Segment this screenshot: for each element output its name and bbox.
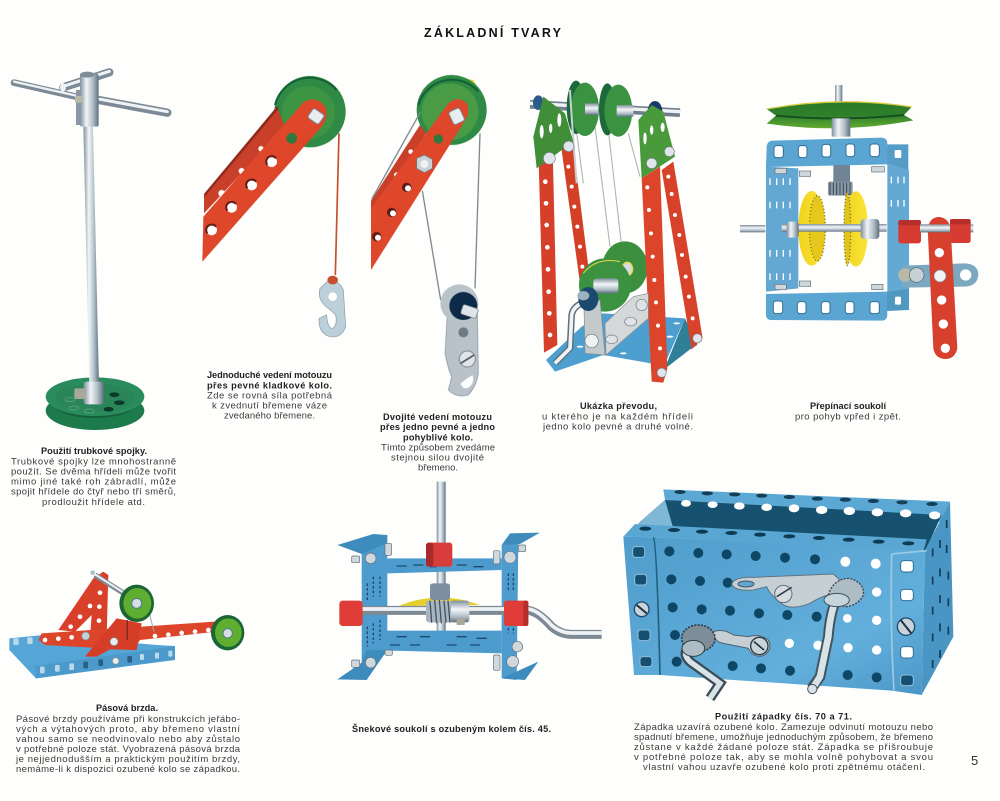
bolts bbox=[543, 141, 702, 377]
caption: tube coupling: mimo jiné také roh zábradlí, může bbox=[11, 476, 176, 488]
caption: band brake: je nejjednodušším a praktickým použitím brzdy, bbox=[15, 754, 240, 765]
caption: double rope guide: Tímto způsobem zvedáme bbox=[381, 442, 495, 454]
page number: 5 bbox=[971, 753, 978, 768]
blue base plate bbox=[9, 635, 175, 678]
lower ratchet wheel and crank bbox=[682, 625, 720, 698]
illustration: gear transmission demo bbox=[530, 81, 703, 383]
caption: transmission demo: u kterého je na každém hřídeli bbox=[542, 412, 693, 422]
caption: band brake: vých a výtahových proto, aby břemeno vlastní bbox=[16, 724, 240, 735]
simple pulley: rear strip bbox=[204, 106, 285, 213]
caption: simple rope guide: zvedaného břemene. bbox=[224, 410, 315, 422]
illustration: band brake bbox=[9, 570, 244, 678]
upper pawl bbox=[732, 574, 840, 607]
caption: tube coupling: Trubkové spojky lze mnohostranně bbox=[11, 456, 176, 468]
simple pulley: hook bbox=[319, 276, 346, 337]
caption: ratchet: vlastní vahou uzavře ozubené kolo proti zpětnému otáčení. bbox=[643, 762, 925, 773]
caption: simple rope guide: Zde se rovná síla potřebná bbox=[207, 390, 333, 402]
left front strip bbox=[538, 149, 557, 353]
side plates of frame bbox=[766, 144, 909, 311]
caption: ratchet: spadnutí břemene, umožňuje jednoduchým způsobem, že břemeno bbox=[634, 732, 933, 743]
corner slots and screws bbox=[633, 547, 915, 686]
caption: band brake bbox=[15, 703, 241, 775]
caption: reversing gear bbox=[795, 401, 901, 422]
lower collar bbox=[74, 382, 104, 404]
arm-end wheel bbox=[211, 615, 244, 650]
right front strip bbox=[642, 167, 667, 383]
worm screw bbox=[426, 600, 469, 625]
caption: band brake: v potřebné poloze stát. Vyobrazená pásová brzda bbox=[16, 744, 241, 755]
top pulley bbox=[767, 85, 913, 137]
front plate holes bbox=[664, 546, 882, 682]
main axle and collars bbox=[740, 219, 887, 239]
worm collar bbox=[430, 583, 450, 600]
upper green wheels bbox=[567, 81, 633, 183]
caption: ratchet: Použití západky čís. 70 a 71. bbox=[715, 712, 852, 722]
caption: tube coupling bbox=[11, 446, 176, 508]
vertical shaft bbox=[437, 482, 446, 642]
caption: simple rope guide: přes pevné kladkové kolo. bbox=[207, 380, 332, 390]
caption: tube coupling: použít. Se dvěma hřídeli může tvořit bbox=[11, 466, 176, 478]
double pulley: front strip bbox=[371, 99, 468, 270]
front top flange bbox=[623, 524, 927, 551]
illustration: worm gear bbox=[337, 482, 602, 680]
caption: double rope guide: přes jedno pevné a jedno bbox=[380, 422, 495, 432]
steel link plate bbox=[898, 263, 978, 288]
left bracket bbox=[337, 534, 387, 680]
caption: simple rope guide: k zvednutí břemene váze bbox=[212, 400, 327, 412]
rear red strips bbox=[560, 137, 703, 349]
double pulley: rear strip bbox=[371, 125, 426, 220]
caption: double rope guide: Dvojité vedení motouzu bbox=[383, 412, 492, 422]
right side face bbox=[922, 502, 953, 695]
hand crank bbox=[555, 287, 598, 363]
blue base bbox=[546, 313, 697, 372]
silver bracket bbox=[584, 293, 648, 355]
lower green wheels bbox=[579, 241, 648, 312]
caption: band brake: nemáme-li k dispozici ozubené kolo se západkou. bbox=[16, 764, 240, 775]
caption: ratchet: v potřebné poloze tak, aby se mohla volně pohybovat a svou bbox=[634, 752, 933, 763]
caption: double rope guide: pohyblivé kolo. bbox=[403, 432, 473, 442]
lower and upper blue plates bbox=[367, 558, 502, 653]
illustration: simple pulley and double pulley bbox=[202, 75, 487, 396]
simple pulley: rope bbox=[335, 133, 339, 275]
caption: simple rope guide bbox=[207, 370, 333, 422]
caption: reversing gear: Přepínací soukolí bbox=[810, 401, 886, 411]
red end blocks bbox=[339, 601, 528, 626]
caption: ratchet bbox=[634, 712, 933, 773]
axle rod and band bbox=[90, 570, 154, 640]
caption: ratchet: Západka uzavírá ozubené kolo. Zamezuje odvinutí motouzu nebo bbox=[634, 722, 933, 733]
caption: reversing gear: pro pohyb vpřed i zpět. bbox=[795, 412, 901, 422]
caption: band brake: vahou samo se neodvinovalo nebo aby zůstalo bbox=[16, 734, 240, 745]
caption: double rope guide: břemeno. bbox=[418, 462, 458, 474]
red triangle frame bbox=[58, 572, 108, 637]
top axle bbox=[530, 95, 680, 122]
yellow bevel gears bbox=[798, 191, 868, 267]
upper ratchet wheel and crank bbox=[808, 578, 863, 694]
double pulley: wheel bbox=[417, 75, 487, 145]
caption: worm gear: Šnekové soukolí s ozubeným kolem čís. 45. bbox=[352, 723, 551, 734]
horizontal shaft bbox=[362, 609, 602, 634]
caption: simple rope guide: Jednoduché vedení motouzu bbox=[207, 370, 332, 380]
caption: transmission demo: Ukázka převodu, bbox=[580, 401, 657, 411]
top plate of frame bbox=[766, 138, 887, 167]
horizontal shaft bbox=[14, 71, 167, 113]
simple pulley: wheel bbox=[274, 76, 346, 147]
upper coupling bbox=[75, 72, 99, 127]
slide rod with red blocks bbox=[898, 219, 973, 243]
caption: transmission demo bbox=[542, 401, 693, 432]
double pulley: ropes bbox=[372, 112, 480, 300]
caption: ratchet: zůstane v každé žádané poloze stát. Západka se přišroubuje bbox=[634, 742, 933, 753]
back plate and interior bbox=[638, 489, 950, 552]
thread strings bbox=[575, 120, 640, 247]
yellow worm wheel bbox=[401, 597, 480, 606]
simple pulley: front strip bbox=[202, 100, 327, 262]
pinion gear bbox=[828, 165, 853, 196]
caption: band brake: Pásové brzdy používáme při konstrukcích jeřábo- bbox=[16, 714, 240, 725]
pulley wheel bbox=[46, 377, 144, 430]
caption: double rope guide bbox=[380, 412, 495, 474]
bottom plate of frame bbox=[766, 292, 887, 321]
lower pawl bbox=[713, 631, 770, 656]
screws on frame bbox=[775, 167, 884, 290]
caption: double rope guide: stejnou silou dvojité bbox=[391, 452, 484, 464]
upper red block bbox=[426, 543, 452, 567]
caption: tube coupling: prodloužit hřídele atd. bbox=[42, 497, 145, 508]
illustration: ratchet box bbox=[623, 489, 953, 698]
movable pulley bbox=[440, 284, 479, 396]
nuts and bolts bbox=[352, 543, 526, 670]
title: ZÁKLADNÍ TVARY bbox=[424, 25, 562, 40]
red lever bbox=[920, 217, 957, 359]
caption: tube coupling: Použití trubkové spojky. bbox=[41, 446, 147, 456]
vertical shaft bbox=[83, 127, 99, 385]
brake wheel bbox=[119, 585, 154, 622]
illustration: tube coupling with pulley bbox=[14, 71, 167, 430]
illustration: reversing gear bbox=[740, 85, 978, 359]
green plates bbox=[533, 97, 675, 178]
brake arm bbox=[38, 618, 217, 664]
caption: transmission demo: jedno kolo pevné a druhé volné. bbox=[542, 422, 693, 432]
caption: band brake: Pásová brzda. bbox=[96, 703, 158, 713]
front plate bbox=[623, 537, 927, 695]
caption: tube coupling: spojit hřídele do čtyř nebo tří směrů, bbox=[11, 486, 176, 498]
right bracket bbox=[502, 533, 540, 680]
